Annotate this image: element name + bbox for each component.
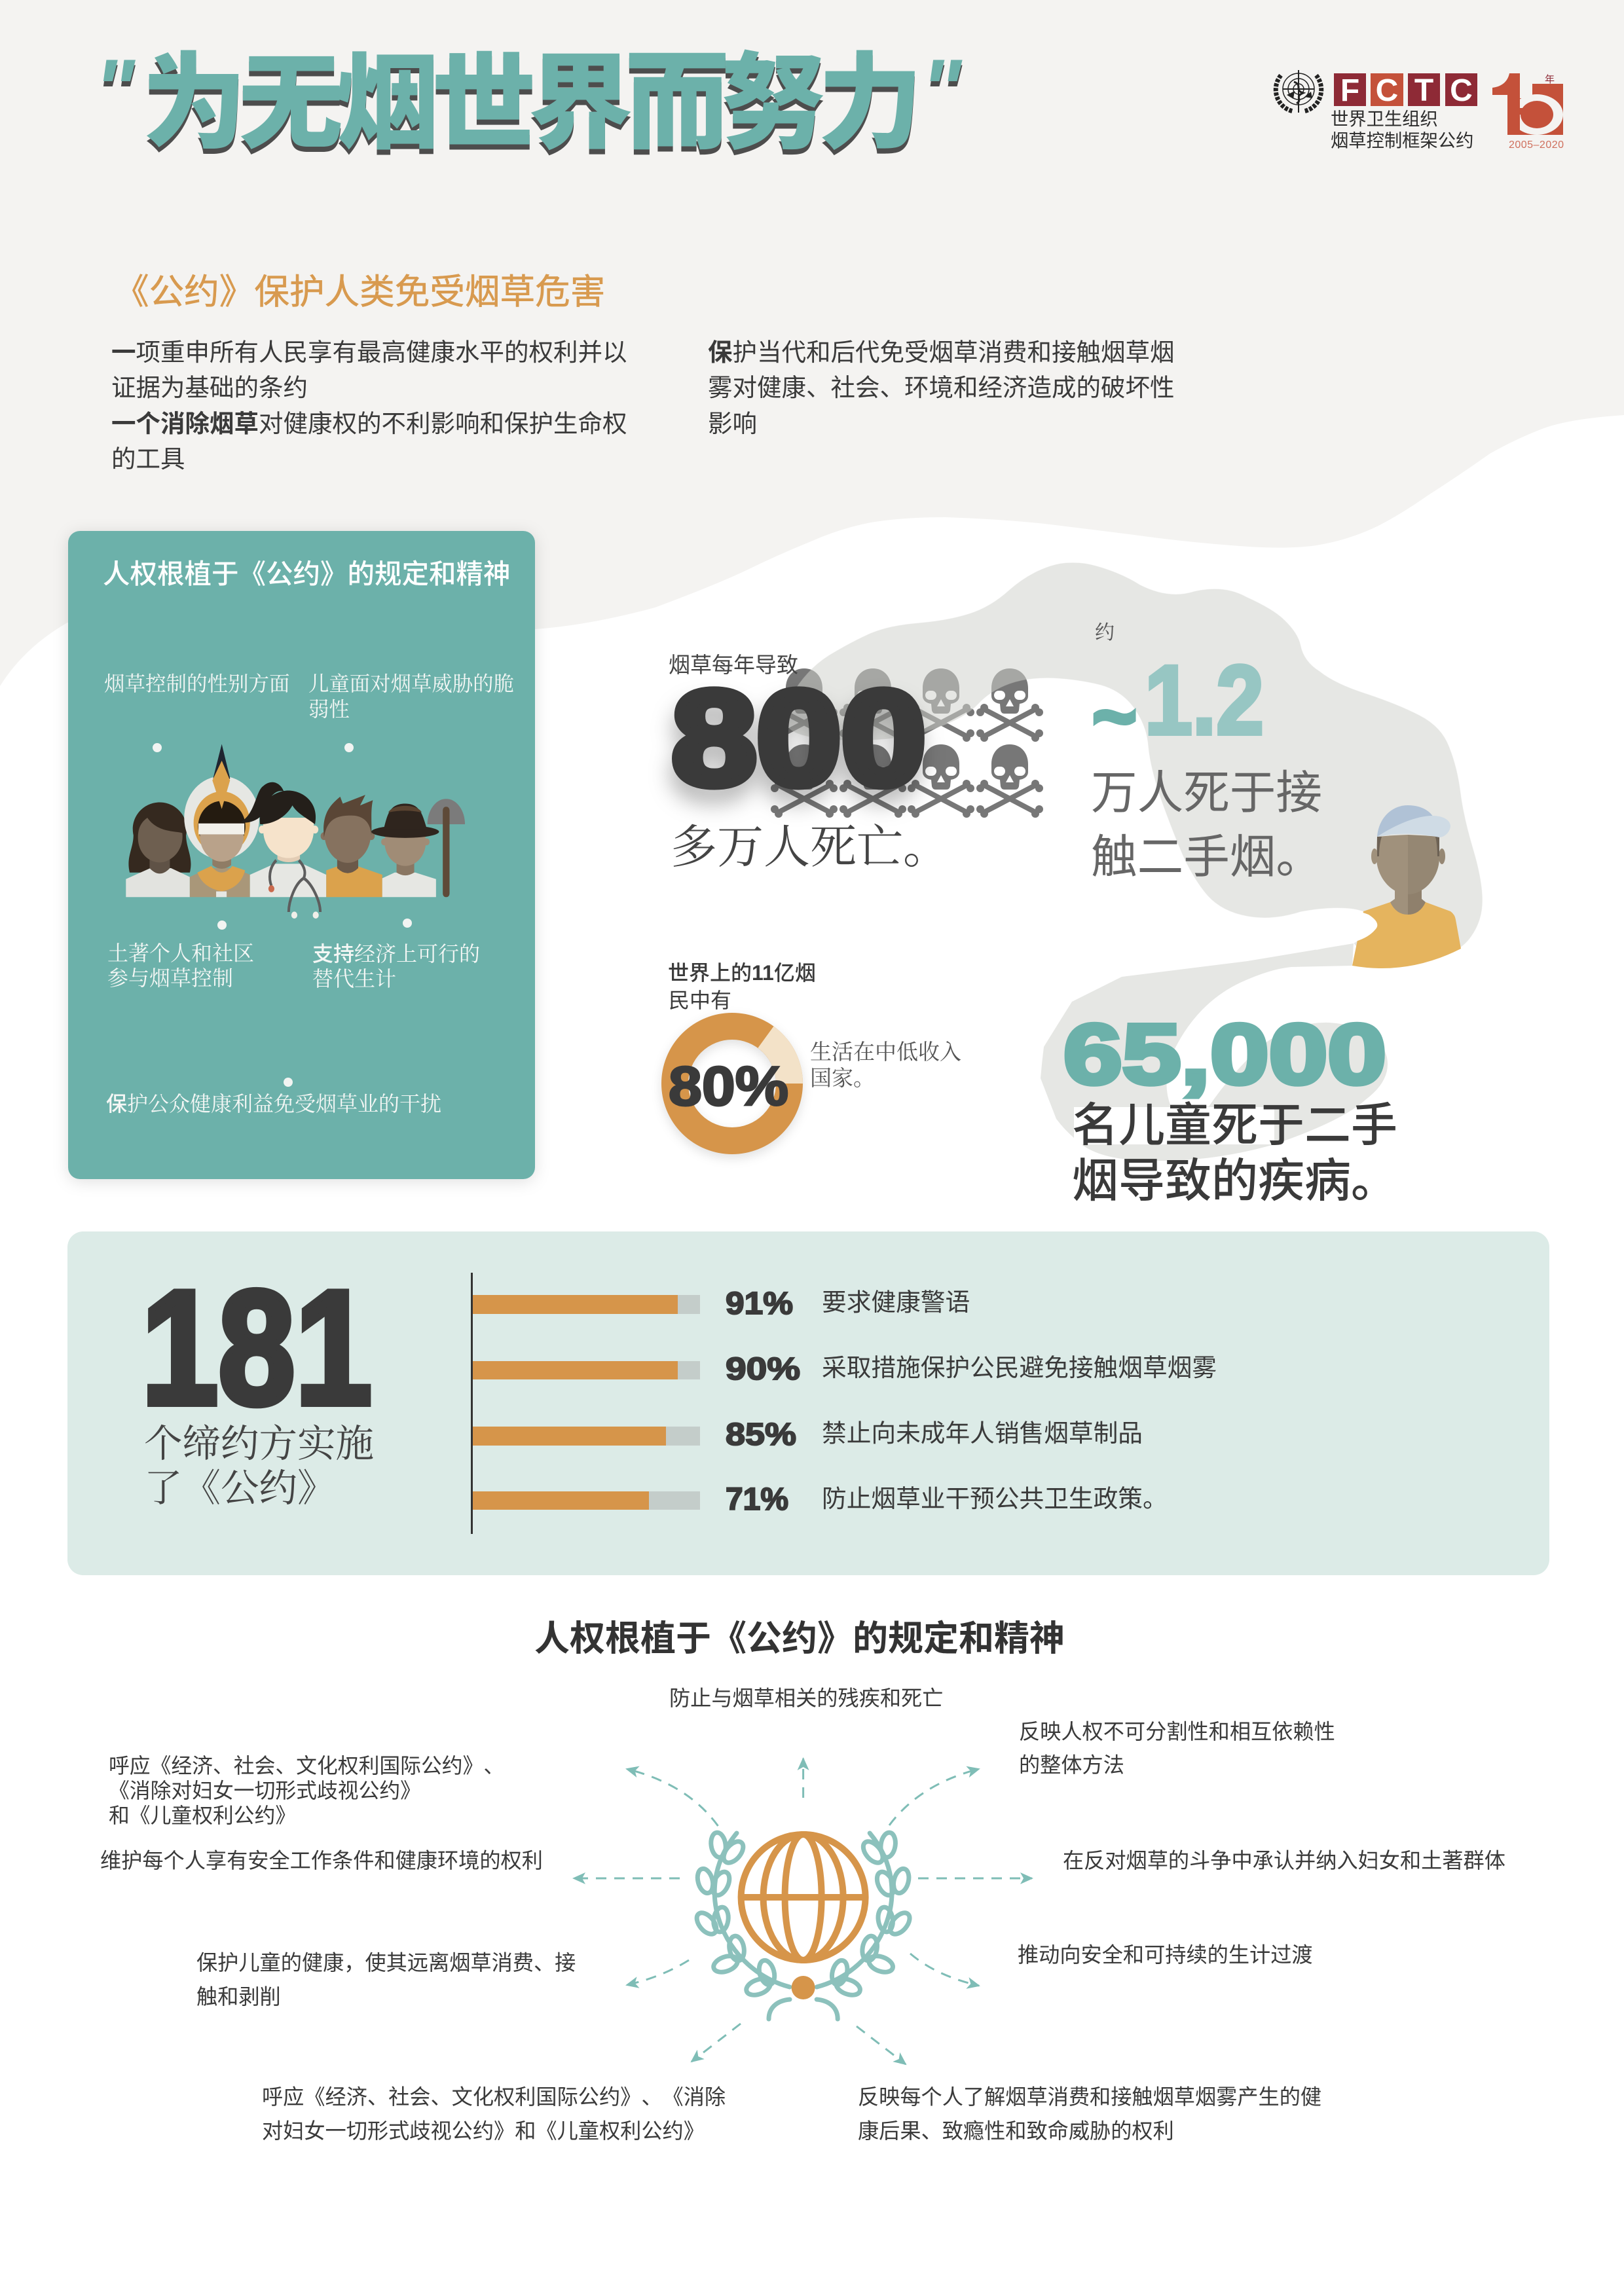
logo text — [1331, 109, 1473, 151]
label: of 1.1 billion smokers: 民中有 — [669, 984, 731, 1014]
section heading: 人权根植于《公约》的规定和精神 — [534, 1609, 1065, 1661]
panel item: children: 弱性 — [308, 698, 350, 721]
bar labels: 要求健康警语 — [822, 1282, 970, 1318]
label: protect children — [196, 1946, 576, 2011]
number 800: 800 — [672, 663, 926, 813]
number 80%: 80% — [669, 1055, 788, 1117]
FCTC squares: C — [1450, 73, 1473, 108]
label: of 1.1 billion smokers: 世界上的11亿烟 — [668, 957, 816, 987]
text: children die: 烟导致的疾病。 — [1072, 1144, 1397, 1211]
text: children die: 名儿童死于二手 — [1072, 1088, 1397, 1155]
text: die from second-hand smoke: 触二手烟。 — [1091, 820, 1322, 886]
panel item: livelihoods: 支持经济上可行的 — [312, 938, 480, 968]
stat: 80% smokers — [668, 957, 961, 1140]
label: right to information — [858, 2081, 1321, 2145]
15 mark: 2005–2020 — [1509, 139, 1564, 151]
smoke shape — [784, 562, 1483, 1161]
label: safe working conditions: 维护每个人享有安全工作条件和健康环境的权利 — [100, 1844, 543, 1874]
stat: 1.2 million second-hand smoke: 约 — [1095, 622, 1115, 644]
logo text: 世界卫生组织 — [1331, 109, 1438, 129]
bar chart — [473, 1295, 700, 1510]
text: parties implemented — [144, 1423, 374, 1510]
intro text: left column: 一个消除烟草对健康权的不利影响和保护生命权 — [111, 403, 627, 439]
panel item: indigenous: 参与烟草控制 — [107, 966, 233, 990]
donut chart — [674, 1027, 790, 1140]
axis line — [471, 1273, 473, 1534]
icon: WHO emblem — [1276, 70, 1321, 113]
bar labels: 采取措施保护公民避免接触烟草烟雾 — [822, 1347, 1217, 1383]
panel heading: 人权根植于《公约》的规定和精神 — [103, 552, 511, 591]
intro text: right column — [708, 332, 1175, 439]
label: holistic approach — [1019, 1715, 1335, 1779]
text: million die: 多万人死亡。 — [671, 822, 950, 873]
percent labels — [726, 1286, 800, 1517]
arrows — [574, 1758, 1032, 2064]
logo: WHO FCTC 15 years — [1276, 70, 1564, 151]
text: parties implemented: 了《公约》 — [144, 1467, 336, 1510]
label: protect children: 保护儿童的健康，使其远离烟草消费、接 — [196, 1946, 576, 1977]
panel item: public health: 保护公众健康利益免受烟草业的干扰 — [106, 1087, 441, 1118]
man with hat — [382, 873, 436, 897]
intro text: left column — [111, 332, 627, 475]
icon: man with cap — [1316, 805, 1461, 968]
woman with long hair — [128, 803, 191, 873]
panel: 181 parties — [67, 1231, 1549, 1575]
percent labels: 91% — [726, 1286, 793, 1321]
label: tobacco causes: 烟草每年导致 — [669, 647, 798, 679]
hoe — [428, 799, 465, 824]
panel item: children — [308, 672, 514, 721]
stat: 8 million deaths — [669, 647, 950, 873]
text: die from second-hand smoke: 万人死于接 — [1091, 756, 1322, 822]
number 65,000: 65,000 — [1063, 1006, 1386, 1102]
label: right to information: 康后果、致瘾性和致命威胁的权利 — [858, 2115, 1174, 2145]
woman doctor — [240, 782, 284, 823]
percent labels: 71% — [726, 1482, 788, 1517]
FCTC squares: F — [1340, 73, 1359, 108]
title: "为无烟世界而努力" — [94, 18, 961, 170]
stat: 1.2 million second-hand smoke — [1091, 622, 1322, 886]
label: prevent disability and death: 防止与烟草相关的残疾和死亡 — [669, 1682, 943, 1712]
intro text: left column: 证据为基础的条约 — [111, 367, 308, 403]
bullet dots — [153, 743, 412, 1087]
15 mark: 年 — [1545, 74, 1555, 85]
icon: globe with laurel wreath — [693, 1832, 913, 2019]
tilde: ~ — [1092, 672, 1137, 760]
panel item: gender: 烟草控制的性别方面 — [104, 672, 290, 695]
text: children die — [1072, 1088, 1397, 1211]
panel: rights rooted in the Convention — [68, 531, 535, 1179]
bar labels: 禁止向未成年人销售烟草制品 — [822, 1413, 1143, 1449]
percent labels: 90% — [726, 1352, 800, 1387]
intro text: left column: 一项重申所有人民享有最高健康水平的权利并以 — [111, 332, 627, 368]
intro text: left column: 的工具 — [111, 439, 185, 475]
FCTC squares: C — [1376, 73, 1398, 108]
text: live in low and middle income: 生活在中低收入 — [810, 1040, 961, 1065]
panel item: livelihoods: 替代生计 — [312, 967, 396, 991]
panel item: indigenous: 土著个人和社区 — [107, 941, 254, 965]
text: live in low and middle income: 国家。 — [810, 1066, 875, 1091]
label: conventions: 《消除对妇女一切形式歧视公约》 — [109, 1774, 421, 1804]
bar labels — [822, 1282, 1217, 1514]
label: of 1.1 billion smokers — [668, 957, 816, 1014]
globe — [741, 1834, 866, 1960]
label: conventions — [109, 1749, 504, 1829]
FCTC squares — [1334, 73, 1477, 108]
label: conventions bottom: 呼应《经济、社会、文化权利国际公约》、《消除 — [262, 2081, 726, 2111]
text: die from second-hand smoke — [1091, 756, 1322, 886]
label: right to information: 反映每个人了解烟草消费和接触烟草烟雾产生的健 — [858, 2081, 1321, 2111]
label: conventions: 呼应《经济、社会、文化权利国际公约》、 — [109, 1749, 504, 1779]
logo text: 烟草控制框架公约 — [1331, 130, 1473, 151]
woman with headdress — [184, 776, 259, 860]
number 181: 181 — [141, 1256, 372, 1438]
label: conventions: 和《儿童权利公约》 — [109, 1799, 296, 1829]
diagram labels — [100, 1682, 1505, 2145]
icon: skull rows — [771, 668, 1043, 818]
label: protect children: 触和剥削 — [196, 1980, 281, 2011]
laurel wreath — [693, 1832, 790, 2019]
label: conventions bottom: 对妇女一切形式歧视公约》和《儿童权利公约》 — [262, 2115, 705, 2145]
label: conventions bottom — [262, 2081, 726, 2145]
wreath knot — [792, 1976, 815, 1999]
panel item: indigenous — [107, 941, 254, 990]
number 1.2: 1.2 — [1145, 645, 1264, 755]
label: holistic approach: 的整体方法 — [1019, 1749, 1124, 1779]
subheading: 《公约》保护人类免受烟草危害 — [114, 264, 605, 314]
young man — [326, 866, 382, 897]
percent labels: 85% — [726, 1417, 796, 1452]
label: women and indigenous: 在反对烟草的斗争中承认并纳入妇女和土著群体 — [1063, 1844, 1505, 1874]
label: livelihood transition: 推动向安全和可持续的生计过渡 — [1018, 1939, 1313, 1969]
FCTC squares: T — [1414, 73, 1433, 108]
15 mark — [1492, 73, 1564, 151]
bar labels: 防止烟草业干预公共卫生政策。 — [822, 1478, 1168, 1514]
text: live in low and middle income — [810, 1040, 961, 1091]
stat: 65,000 children — [1063, 1006, 1397, 1211]
intro text: right column: 影响 — [708, 403, 757, 439]
panel item: children: 儿童面对烟草威胁的脆 — [308, 672, 514, 695]
label: holistic approach: 反映人权不可分割性和相互依赖性 — [1019, 1715, 1335, 1745]
intro text: right column: 雾对健康、社会、环境和经济造成的破坏性 — [708, 367, 1175, 403]
intro text: right column: 保护当代和后代免受烟草消费和接触烟草烟 — [708, 332, 1175, 368]
panel item: livelihoods — [312, 938, 480, 991]
icon: group of people — [126, 744, 465, 919]
text: parties implemented: 个缔约方实施 — [144, 1423, 374, 1465]
